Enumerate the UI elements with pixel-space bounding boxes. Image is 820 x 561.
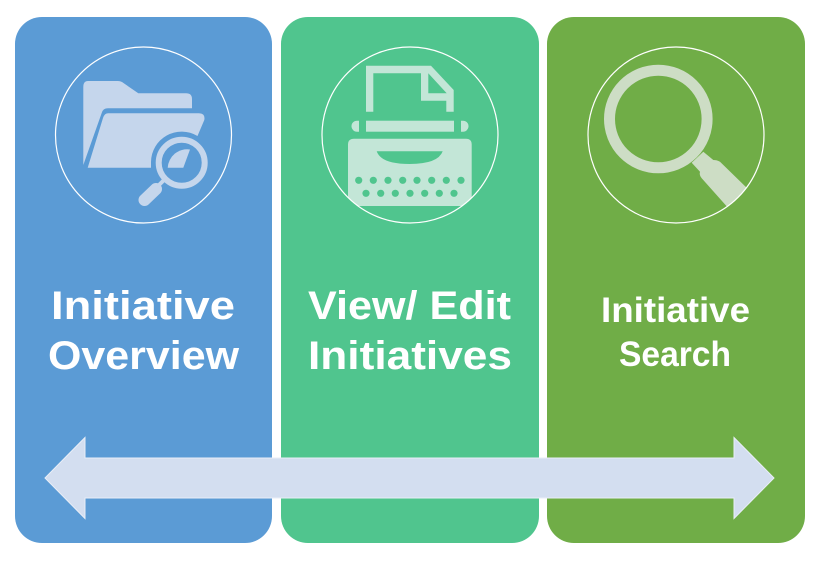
heading: Initiative Search: Search — [619, 335, 731, 374]
icon: folder with magnifier — [56, 47, 232, 223]
heading: Initiative Overview: Overview — [48, 334, 240, 378]
heading: Initiative Search: Initiative — [601, 291, 750, 330]
icon: typewriter — [322, 47, 498, 223]
arrow: double-headed — [45, 438, 774, 518]
panel: View/ Edit Initiatives — [281, 17, 539, 543]
heading: View/ Edit Initiatives — [308, 284, 512, 378]
panel: Initiative Overview — [15, 17, 272, 543]
heading: View/ Edit Initiatives: View/ Edit — [308, 284, 511, 328]
icon: magnifying glass — [588, 47, 764, 223]
heading: Initiative Overview — [48, 284, 240, 378]
heading: View/ Edit Initiatives: Initiatives — [308, 334, 512, 378]
heading: Initiative Search — [601, 291, 750, 374]
heading: Initiative Overview: Initiative — [51, 284, 235, 328]
panel: Initiative Search — [547, 17, 805, 543]
